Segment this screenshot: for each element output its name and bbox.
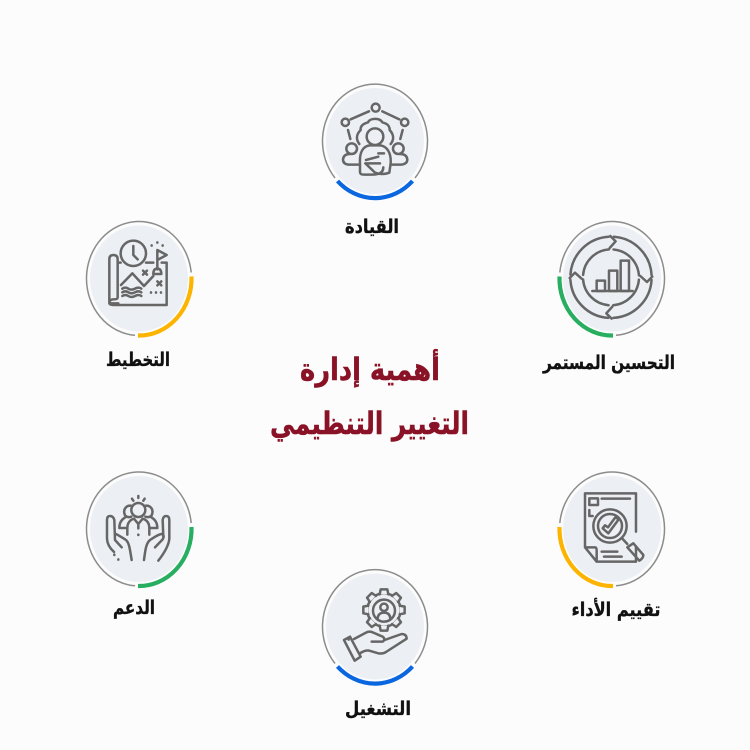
icon: map with clock and flag <box>109 241 167 305</box>
panel: leadership <box>322 84 428 238</box>
ring: performance evaluation <box>559 472 665 586</box>
ring: continuous improvement <box>559 221 665 336</box>
ring: planning <box>86 221 192 336</box>
title <box>270 349 469 442</box>
panel: continuous improvement <box>542 221 675 374</box>
label: continuous improvement: التحسين المستمر <box>542 352 675 374</box>
label: leadership: القيادة <box>345 216 399 238</box>
label: planning: التخطيط <box>106 349 170 371</box>
title line 1: أهمية إدارة <box>300 349 440 388</box>
icon: hands holding people <box>107 496 169 561</box>
ring: operations <box>322 570 428 684</box>
panel: operations <box>322 570 428 720</box>
ring: support <box>86 472 192 586</box>
icon: document under magnifier <box>585 493 643 562</box>
panel: performance evaluation <box>559 472 665 621</box>
icon: cycle with bar chart <box>570 236 652 319</box>
label: operations: التشغيل <box>345 698 411 720</box>
label: support: الدعم <box>113 597 155 619</box>
panel: planning <box>86 221 192 371</box>
label: performance evaluation: تقييم الأداء <box>572 598 660 621</box>
ring: leadership <box>322 84 428 198</box>
icon: leader with team <box>342 104 408 175</box>
title line 2: التغيير التنظيمي <box>270 406 469 442</box>
icon: hand holding gear and person <box>344 589 407 661</box>
panel: support <box>86 472 192 619</box>
